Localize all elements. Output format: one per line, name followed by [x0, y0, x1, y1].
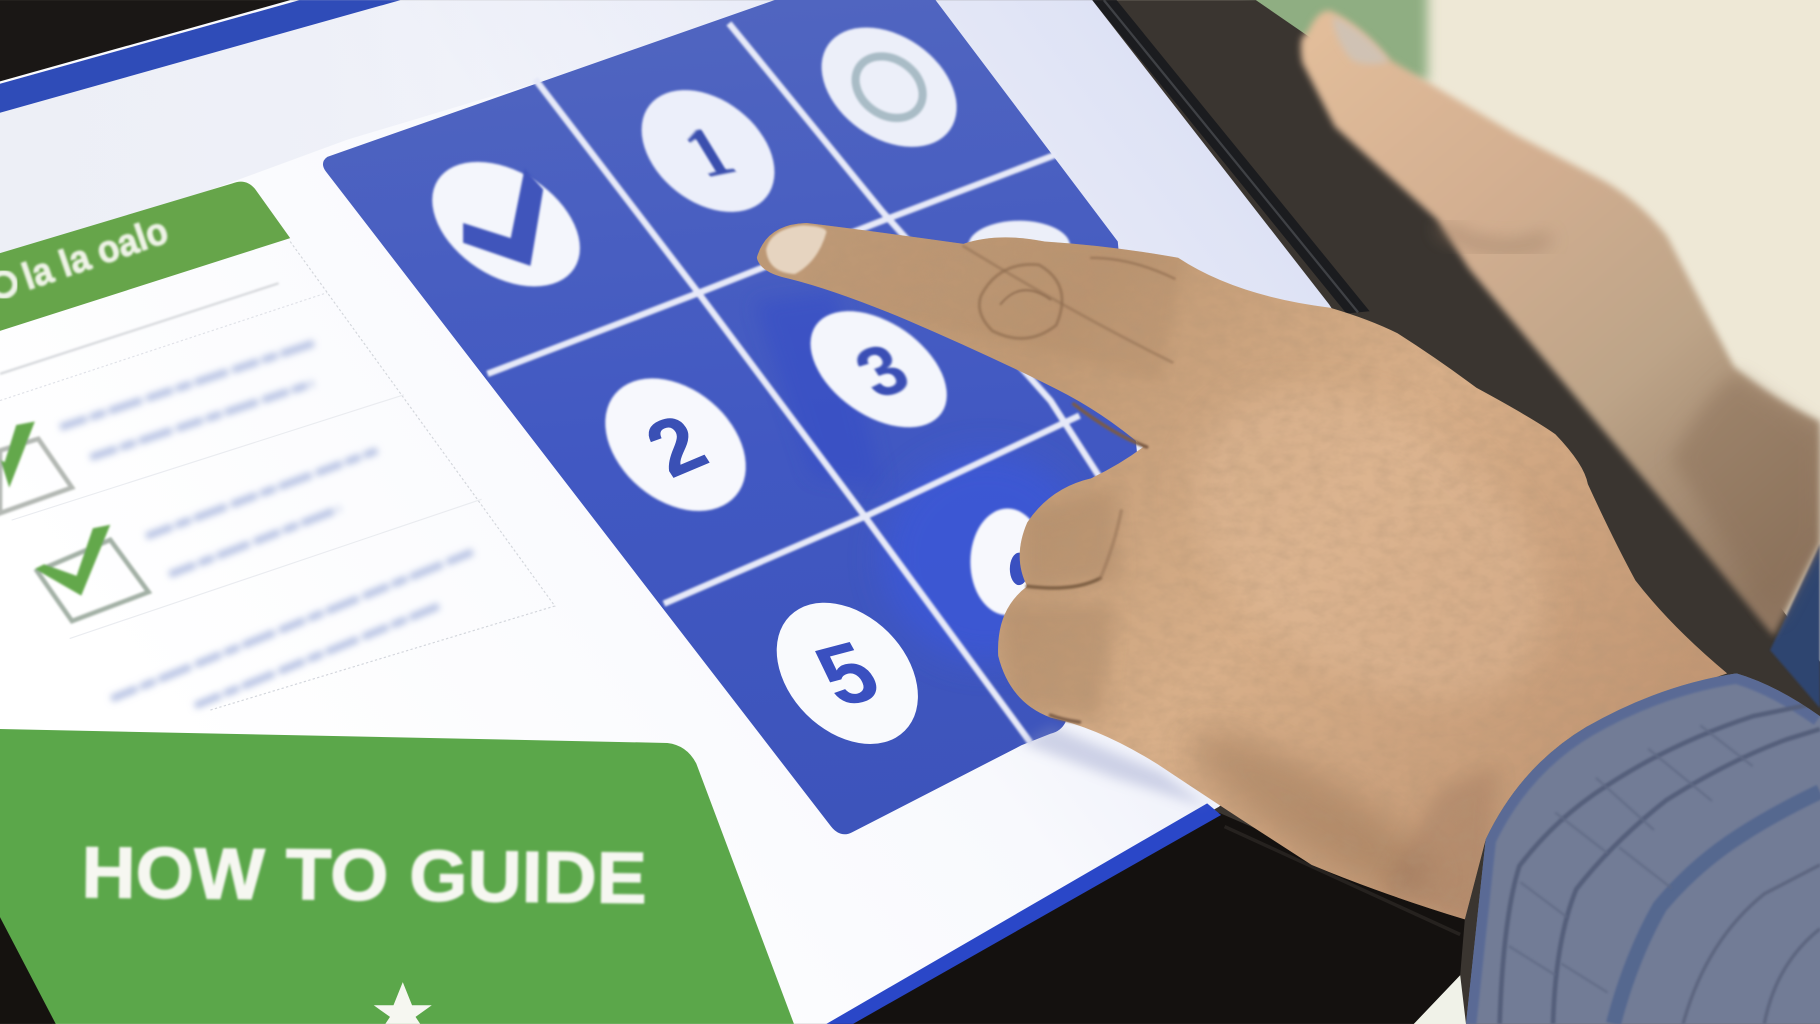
green guide banner — [0, 729, 794, 1024]
hand shadow on screen — [1021, 726, 1207, 807]
tile: 3 — [789, 287, 968, 451]
grid background — [323, 0, 1138, 834]
sleeve weave — [1509, 726, 1753, 993]
tile: 1 — [618, 65, 798, 237]
green header bar: la la oalo — [17, 209, 173, 299]
pointing hand — [743, 209, 1741, 929]
tile: 2 — [579, 351, 772, 538]
tile: partly hidden circle — [968, 221, 1070, 272]
back hand holding tablet — [1301, 11, 1820, 708]
tile: check — [409, 136, 603, 312]
tile: 2: 2 — [629, 397, 723, 494]
knuckle creases — [963, 246, 1175, 722]
green header bar — [0, 182, 290, 331]
tile: 5: 5 — [799, 624, 895, 724]
sleeve bands — [1466, 673, 1820, 1024]
tile: 3: 3 — [840, 328, 924, 413]
hand body — [743, 209, 1741, 929]
checkbox 2 — [35, 525, 149, 621]
list panel outline — [0, 242, 555, 710]
tile: 1: 1 — [669, 113, 749, 193]
grid dividing lines — [488, 23, 1100, 743]
list text lines — [60, 343, 474, 706]
star icon — [374, 982, 432, 1024]
banner title: HOW TO GUIDE — [81, 833, 647, 919]
tile: 5 — [749, 575, 946, 772]
left checklist panel — [0, 182, 555, 710]
dark sleeve at right edge — [1770, 543, 1820, 708]
number grid — [323, 0, 1138, 834]
tile: ring icon — [799, 3, 979, 172]
shirt sleeve — [1451, 662, 1820, 1024]
checkbox 1 — [0, 421, 72, 513]
tile: partial 6 — [970, 509, 1045, 615]
fingernail — [766, 225, 826, 274]
highlight and shade patches — [1207, 410, 1539, 690]
